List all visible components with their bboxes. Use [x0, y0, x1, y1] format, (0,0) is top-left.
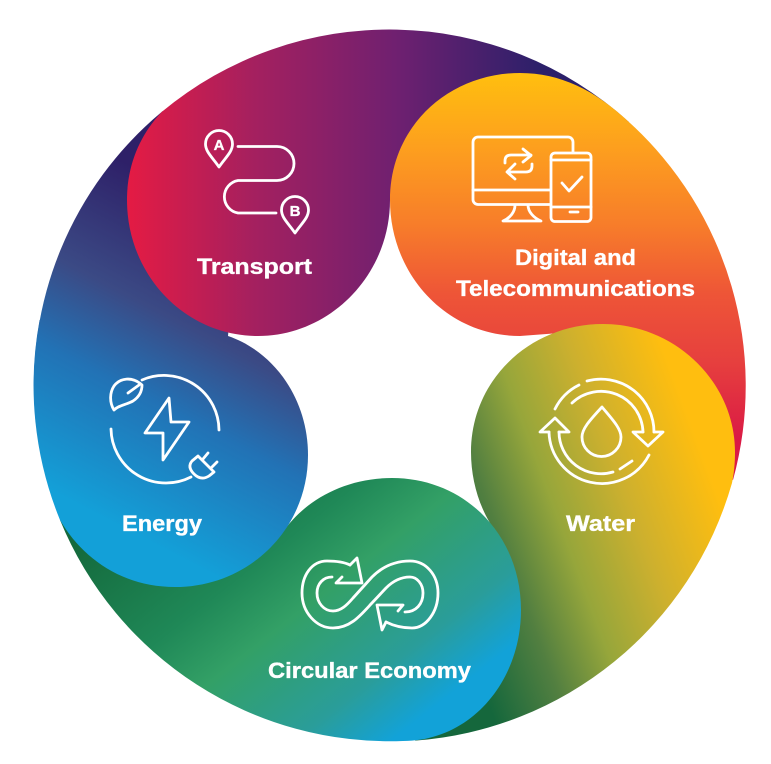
- panel: water: [415, 324, 735, 741]
- icon: energy bolt, leaf and plug: [111, 375, 219, 483]
- icon: monitor and phone: [473, 137, 591, 222]
- icon: route from A to B: [206, 130, 308, 233]
- label: Digital and Telecommunications: [456, 245, 695, 301]
- icon: infinity loop arrows: [302, 558, 438, 630]
- transport petal shape: [127, 29, 629, 336]
- energy petal upper tail: [34, 111, 240, 420]
- panel: energy: [34, 320, 308, 587]
- panel: digital and telecommunications: [390, 73, 746, 480]
- label: Circular Economy: Circular Economy: [268, 658, 472, 683]
- icon: route from A to B: A: [214, 137, 225, 154]
- energy petal shape: [34, 320, 308, 587]
- label: Digital and Telecommunications: Digital and: [515, 245, 636, 270]
- label: Energy: Energy: [122, 511, 203, 536]
- icon: route from A to B: B: [290, 203, 301, 220]
- digital petal shape: [390, 73, 746, 480]
- icon: water cycle: [540, 379, 663, 484]
- panel: circular economy: [60, 478, 521, 741]
- panel: transport: [127, 29, 629, 336]
- water petal shape: [415, 324, 735, 741]
- label: Water: Water: [566, 511, 635, 536]
- label: Digital and Telecommunications: Telecommunications: [456, 276, 695, 301]
- label: Transport: Transport: [197, 254, 313, 279]
- circular economy petal shape: [60, 478, 521, 741]
